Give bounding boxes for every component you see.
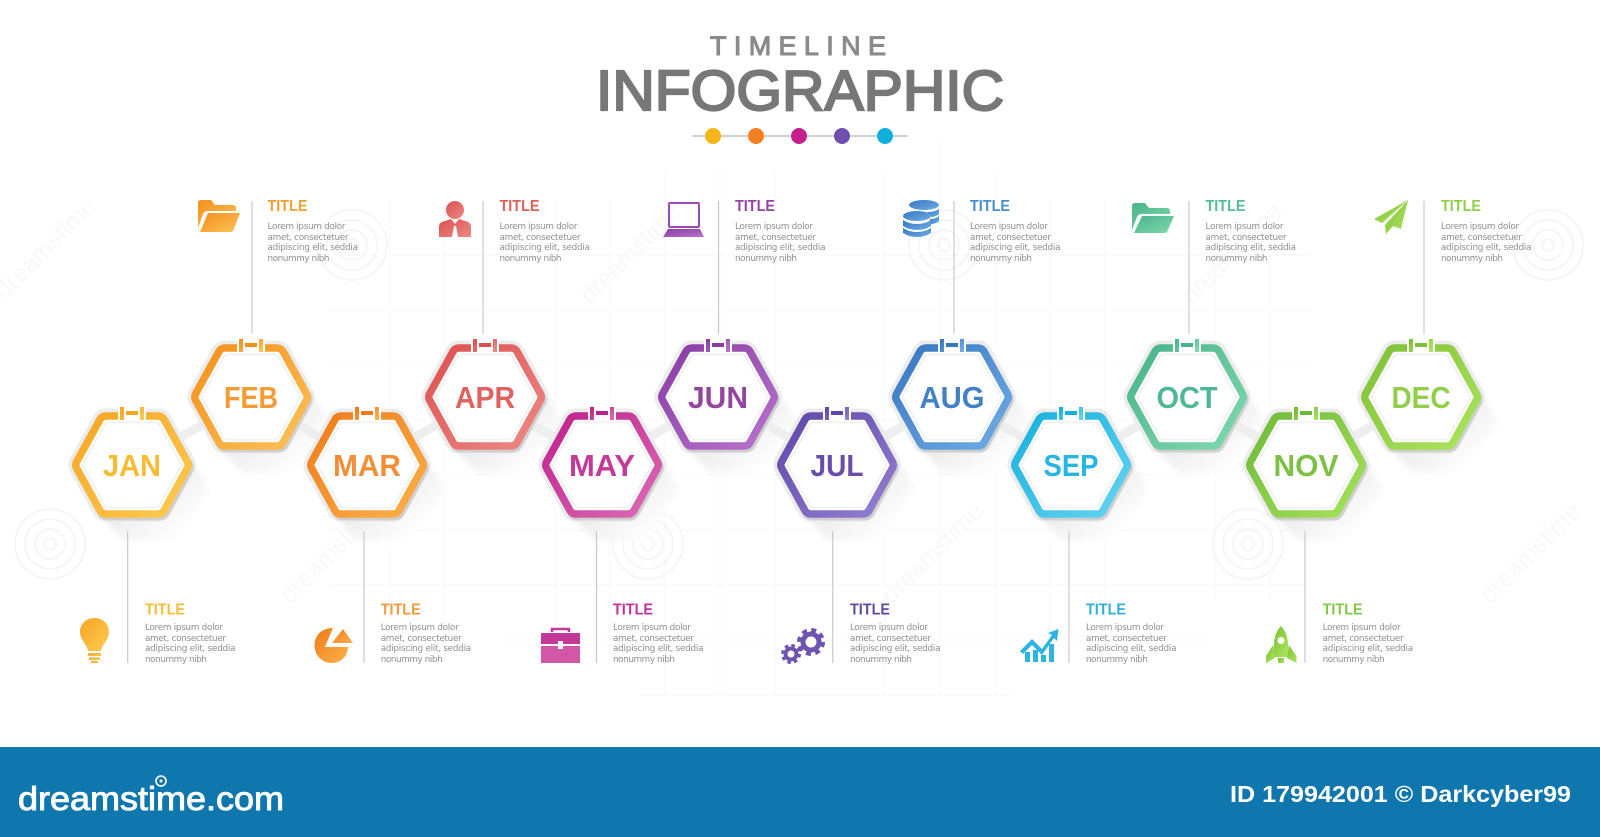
- text block: AUG: adipiscing elit, seddia: [970, 243, 1060, 253]
- text block: FEB: [268, 198, 358, 264]
- text block: AUG: amet, consectetuer: [970, 233, 1051, 243]
- text block: OCT: nonummy nibh: [1206, 254, 1268, 264]
- hexagon: JUL: [781, 407, 895, 516]
- hexagon: JUN: JUN: [688, 380, 748, 415]
- hexagon: OCT: [1131, 339, 1245, 448]
- text block: NOV: [1323, 602, 1413, 665]
- watermarks: [0, 192, 1587, 609]
- icon: rocket: [1266, 626, 1296, 663]
- text block: JUN: adipiscing elit, seddia: [735, 243, 826, 253]
- text block: JAN: Lorem ipsum dolor: [145, 623, 223, 633]
- text block: OCT: amet, consectetuer: [1206, 233, 1287, 243]
- hexagon: FEB: FEB: [224, 380, 278, 415]
- text block: OCT: [1206, 198, 1296, 264]
- text block: JUL: amet, consectetuer: [850, 634, 931, 644]
- text block: MAY: amet, consectetuer: [613, 634, 694, 644]
- hexagon: NOV: NOV: [1274, 448, 1339, 483]
- text block: AUG: [970, 198, 1060, 264]
- text block: JUN: amet, consectetuer: [735, 233, 816, 243]
- text block: NOV: Lorem ipsum dolor: [1323, 623, 1401, 633]
- text block: OCT: adipiscing elit, seddia: [1206, 243, 1296, 253]
- hexagon: MAR: MAR: [333, 448, 401, 483]
- icon: gears: [782, 630, 823, 662]
- icon: coins: [903, 200, 939, 237]
- text block: JUL: TITLE: [850, 602, 890, 618]
- text block: APR: adipiscing elit, seddia: [500, 243, 590, 253]
- text block: NOV: amet, consectetuer: [1323, 634, 1404, 644]
- footer banner: [0, 747, 1600, 837]
- connector band: [132, 397, 1421, 465]
- hexagon long shadows: [100, 365, 1499, 541]
- watermarks: dreamstime: [1176, 197, 1289, 309]
- text block: MAR: nonummy nibh: [381, 655, 443, 665]
- text block: JAN: nonummy nibh: [145, 655, 207, 665]
- hexagon: FEB: [195, 339, 309, 448]
- text block: AUG: Lorem ipsum dolor: [970, 222, 1048, 232]
- text block: SEP: amet, consectetuer: [1086, 634, 1167, 644]
- dreamstime logo: dreamstime.com: [18, 780, 284, 817]
- text block: JUN: nonummy nibh: [735, 254, 797, 264]
- icon: light bulb: [80, 618, 109, 663]
- icon: folder orange: [198, 200, 240, 232]
- hexagon: DEC: [1365, 339, 1479, 448]
- icon: person: [439, 201, 471, 237]
- text block: JAN: amet, consectetuer: [145, 634, 226, 644]
- text block: JUL: nonummy nibh: [850, 655, 912, 665]
- hexagon: JAN: JAN: [103, 448, 161, 483]
- text block: SEP: nonummy nibh: [1086, 655, 1148, 665]
- text block: APR: amet, consectetuer: [500, 233, 581, 243]
- icon: laptop: [663, 203, 704, 237]
- hexagon: SEP: SEP: [1044, 448, 1098, 483]
- text block: MAR: adipiscing elit, seddia: [381, 644, 471, 654]
- text block: NOV: nonummy nibh: [1323, 655, 1385, 665]
- watermarks: dreamstime: [1474, 497, 1587, 609]
- text block: AUG: nonummy nibh: [970, 254, 1032, 264]
- text block: NOV: TITLE: [1323, 602, 1363, 618]
- text block: DEC: TITLE: [1441, 198, 1481, 215]
- text block: JUL: adipiscing elit, seddia: [850, 644, 940, 654]
- text block: MAY: TITLE: [613, 602, 653, 618]
- hexagon: SEP: [1015, 407, 1129, 516]
- hexagon: MAR: [311, 407, 425, 516]
- text block: SEP: Lorem ipsum dolor: [1086, 623, 1164, 633]
- icon: pie chart: [314, 628, 353, 663]
- icon: growth chart: [1020, 629, 1058, 662]
- title dots: [692, 128, 908, 144]
- text block: FEB: adipiscing elit, seddia: [268, 243, 358, 253]
- text block: SEP: adipiscing elit, seddia: [1086, 644, 1176, 654]
- text block: FEB: Lorem ipsum dolor: [268, 222, 346, 232]
- text block: DEC: nonummy nibh: [1441, 254, 1503, 264]
- watermarks: dreamstime: [274, 497, 387, 609]
- hexagon: MAY: MAY: [569, 448, 635, 483]
- text block: JAN: [145, 602, 236, 665]
- text block: DEC: Lorem ipsum dolor: [1441, 222, 1519, 232]
- hexagon: OCT: OCT: [1156, 380, 1218, 415]
- text block: FEB: TITLE: [268, 198, 308, 215]
- text block: JUN: TITLE: [735, 198, 775, 215]
- hexagon: AUG: [896, 339, 1010, 448]
- text block: AUG: TITLE: [970, 198, 1010, 215]
- icon: briefcase: [541, 629, 580, 663]
- text block: MAY: nonummy nibh: [613, 655, 675, 665]
- hexagon: JUN: [662, 339, 776, 448]
- text block: MAR: amet, consectetuer: [381, 634, 462, 644]
- text block: MAY: [613, 602, 704, 665]
- text block: MAY: adipiscing elit, seddia: [613, 644, 704, 654]
- text block: JUN: [735, 198, 826, 264]
- text block: DEC: [1441, 198, 1532, 264]
- text block: DEC: amet, consectetuer: [1441, 233, 1522, 243]
- hexagon: AUG: AUG: [920, 380, 984, 415]
- text block: JAN: adipiscing elit, seddia: [145, 644, 236, 654]
- title: timeline: TIMELINE: [710, 31, 886, 61]
- text block: SEP: TITLE: [1086, 602, 1126, 618]
- background grid: [330, 140, 1310, 695]
- hexagon: NOV: [1250, 407, 1364, 516]
- leader lines: [128, 201, 1424, 663]
- icon: folder green: [1132, 203, 1174, 233]
- hexagon: APR: [429, 339, 543, 448]
- credit text: ID 179942001 © Darkcyber99: [1230, 781, 1571, 807]
- hexagon: DEC: DEC: [1392, 380, 1450, 415]
- text block: MAR: TITLE: [381, 602, 421, 618]
- text block: APR: Lorem ipsum dolor: [500, 222, 578, 232]
- text block: DEC: adipiscing elit, seddia: [1441, 243, 1532, 253]
- text block: JUL: [850, 602, 940, 665]
- hexagon: APR: APR: [455, 380, 515, 415]
- text block: MAR: [381, 602, 471, 665]
- hexagon: MAY: [546, 407, 660, 516]
- text block: APR: [500, 198, 590, 264]
- text block: NOV: adipiscing elit, seddia: [1323, 644, 1413, 654]
- text block: MAR: Lorem ipsum dolor: [381, 623, 459, 633]
- title: infographic: INFOGRAPHIC: [596, 59, 1004, 123]
- hexagon: JUL: JUL: [810, 448, 864, 483]
- watermarks: dreamstime: [876, 497, 989, 609]
- text block: FEB: nonummy nibh: [268, 254, 330, 264]
- text block: OCT: TITLE: [1206, 198, 1246, 215]
- text block: FEB: amet, consectetuer: [268, 233, 349, 243]
- hexagon: JAN: [76, 407, 190, 516]
- text block: APR: TITLE: [500, 198, 540, 215]
- text block: APR: nonummy nibh: [500, 254, 562, 264]
- text block: SEP: [1086, 602, 1176, 665]
- text block: MAY: Lorem ipsum dolor: [613, 623, 691, 633]
- text block: JUL: Lorem ipsum dolor: [850, 623, 928, 633]
- text block: JUN: Lorem ipsum dolor: [735, 222, 813, 232]
- watermarks: dreamstime: [574, 197, 687, 309]
- text block: OCT: Lorem ipsum dolor: [1206, 222, 1284, 232]
- text block: JAN: TITLE: [145, 602, 185, 618]
- icon: paper plane: [1374, 200, 1408, 234]
